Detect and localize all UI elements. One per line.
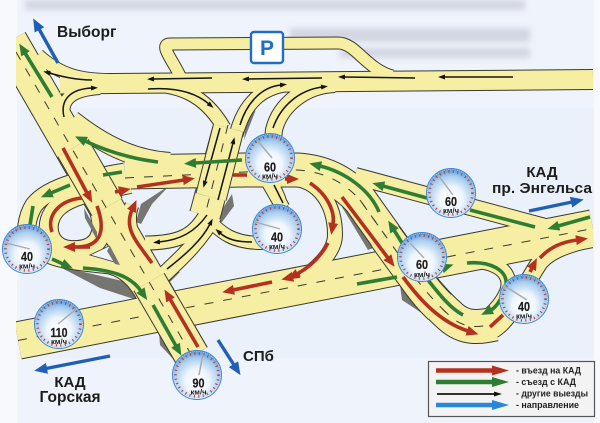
direction label: КАД Горская: КАД [54, 374, 86, 391]
black arrows: other exits [49, 73, 513, 269]
gauge: 40 km/h west [2, 224, 52, 274]
legend: - съезд с КАД [516, 377, 576, 387]
gauge: 40 km/h centre [252, 204, 302, 254]
gauge: 60 km/h ring road: 60 [416, 257, 428, 272]
KAD centre dashes [18, 228, 593, 340]
overpass: main road over KAD [149, 282, 192, 356]
white triangle near left loop [90, 246, 118, 263]
underpass shadows [58, 103, 470, 362]
gauge: 40 km/h centre: 40 [271, 230, 283, 244]
overpass: ring road over KAD [360, 200, 450, 316]
gauge: 60 km/h ring road [398, 232, 446, 282]
overpass: main road over band [73, 148, 107, 207]
direction label: КАД пр. Энгельса: пр. Энгельса [492, 181, 593, 197]
direction label: СПб: СПб [243, 348, 274, 365]
legend [428, 362, 594, 416]
legend: - другие выезды [516, 388, 588, 398]
gauge: 60 km/h ring road: км/ч [414, 272, 430, 279]
gauge: 60 km/h east [426, 168, 476, 218]
green arrows: exit from KAD [25, 53, 590, 346]
red arrows: entry to KAD [51, 148, 577, 347]
icon: parking sign [251, 32, 283, 63]
gauge: 60 km/h [246, 134, 294, 182]
direction label: Выборг [39, 24, 117, 63]
gauge: 40 km/h south-east: км/ч [516, 314, 532, 320]
legend: - направление [516, 400, 579, 410]
gauge: 40 km/h west: км/ч [19, 264, 35, 270]
icon: parking sign: P [260, 37, 274, 60]
gauge: 90 km/h: км/ч [190, 390, 206, 396]
gauge: 40 km/h south-east: 40 [518, 299, 530, 314]
gauge: 40 km/h south-east [500, 274, 548, 324]
gauge: 110 km/h: 110 [50, 325, 68, 340]
gauge: 60 km/h east: км/ч [443, 208, 459, 215]
direction label: КАД пр. Энгельса: КАД [526, 164, 558, 181]
road surfaces [10, 41, 595, 356]
gauge: 60 km/h east: 60 [445, 194, 457, 209]
gauge: 90 km/h: 90 [192, 376, 204, 390]
gauge: 90 km/h [172, 350, 222, 400]
gauge: 60 km/h: км/ч [262, 174, 278, 180]
direction label: СПб [218, 340, 274, 365]
road network [10, 41, 595, 356]
gauge: 110 km/h [34, 300, 84, 348]
legend: - въезд на КАД [516, 366, 581, 376]
gauge: 110 km/h: км/ч [51, 339, 67, 346]
direction label: Выборг: Выборг [57, 24, 117, 41]
direction label: КАД пр. Энгельса [492, 164, 593, 211]
gauge: 40 km/h centre: км/ч [269, 244, 285, 251]
road outlines [10, 41, 595, 356]
ring road dashes [125, 170, 495, 327]
shadow under main road [84, 208, 97, 240]
shadow beside left triangle [107, 246, 120, 265]
direction label: КАД Горская: Горская [40, 389, 100, 406]
main road dashes [16, 52, 192, 356]
gauge: 40 km/h west: 40 [21, 249, 33, 264]
direction label: КАД Горская [40, 356, 110, 406]
overpass: central road over band [205, 125, 228, 215]
gauge: 60 km/h: 60 [264, 160, 276, 174]
